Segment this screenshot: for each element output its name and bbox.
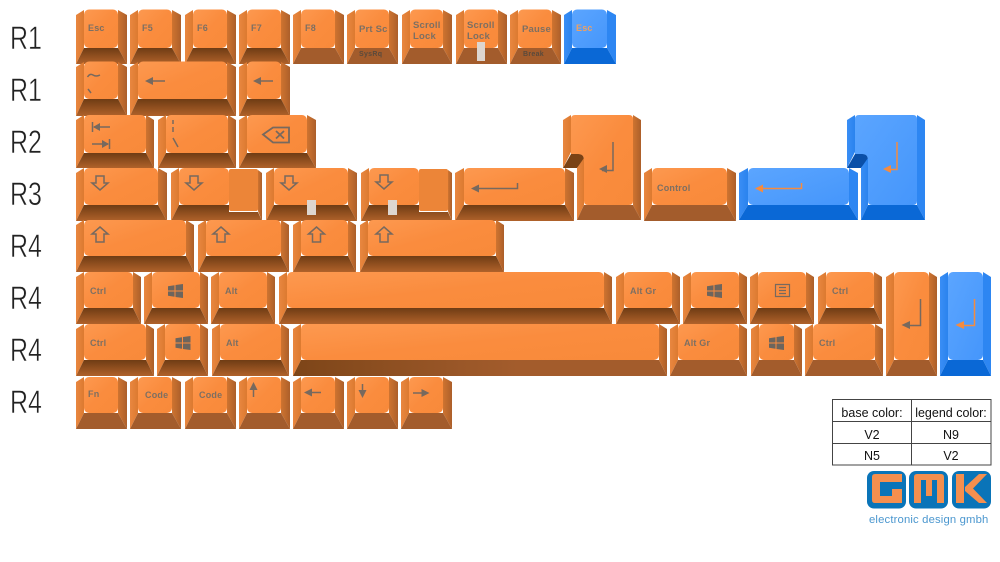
key: shift down 1	[76, 168, 167, 221]
row label: R1 second: R1	[10, 73, 42, 109]
key: Control	[644, 168, 736, 221]
color table: N9	[943, 428, 959, 442]
key: Alt Gr row seven	[670, 324, 747, 376]
key: F5: F5	[142, 23, 153, 33]
row label: R4 shift row: R4	[10, 229, 42, 265]
key: spacebar 7u	[279, 272, 612, 324]
key: F6	[185, 10, 236, 64]
key: Code: Code	[145, 390, 168, 400]
key: arrow down	[347, 377, 398, 429]
key: stepped shift with stem	[361, 168, 452, 221]
key: Alt Gr: Alt Gr	[630, 286, 656, 296]
color table: V2	[864, 428, 880, 442]
key: Code second	[185, 377, 236, 429]
key: Prt Sc: Prt Sc	[359, 24, 388, 35]
key: F7	[239, 10, 290, 64]
key: Prt Sc	[347, 10, 398, 64]
key: shift up large	[76, 220, 194, 272]
key: Scroll Lock: Scroll	[413, 20, 441, 31]
key: F5	[130, 10, 181, 64]
key: blue Esc: Esc	[576, 23, 593, 33]
key: Windows	[144, 272, 208, 324]
key: ISO enter orange	[563, 115, 641, 220]
key: stepped shift	[171, 168, 262, 221]
key: Alt	[211, 272, 275, 324]
row label: R1: R1	[10, 21, 42, 57]
key: F8	[293, 10, 344, 64]
key: Ctrl right	[818, 272, 882, 324]
key: backspace 1u	[239, 62, 290, 116]
key: Scroll Lock with stem: Scroll	[467, 20, 495, 31]
key: Windows right	[683, 272, 747, 324]
key: blue long enter	[739, 168, 858, 220]
key: F8: F8	[305, 23, 316, 33]
key: Menu	[750, 272, 814, 324]
key: Alt Gr	[616, 272, 680, 324]
key: shift up small	[293, 220, 356, 272]
tagline: electronic design gmbh	[869, 514, 988, 526]
key: Ctrl right row seven	[805, 324, 883, 376]
key: Windows right row seven	[751, 324, 802, 376]
key: blue Esc	[564, 10, 616, 64]
key: Pause	[510, 10, 561, 64]
key: Tab	[76, 115, 154, 168]
row label: R2: R2	[10, 125, 42, 161]
row label: R4 control row: R4	[10, 281, 42, 317]
key: F6: F6	[197, 23, 208, 33]
key: Windows row seven	[157, 324, 208, 376]
key: Esc: Esc	[88, 23, 105, 33]
key: Ctrl: Ctrl	[90, 286, 106, 296]
key: Alt Gr row seven: Alt Gr	[684, 338, 710, 348]
color table: base color:	[841, 406, 903, 420]
key: arrow left	[293, 377, 344, 429]
key: Alt row seven: Alt	[226, 338, 239, 348]
key: Ctrl row seven	[76, 324, 154, 376]
key: Pause: Pause	[522, 24, 551, 35]
key: backslash	[158, 115, 236, 168]
key: long enter	[455, 168, 574, 221]
GMK logo	[867, 471, 991, 508]
key: tilde	[76, 62, 127, 116]
key: arrow right	[401, 377, 452, 429]
key: Ctrl right row seven: Ctrl	[819, 338, 835, 348]
key: shift up medium	[198, 220, 289, 272]
key: tall enter orange	[886, 272, 937, 376]
key: tall enter blue	[940, 272, 991, 376]
key: Control: Control	[657, 183, 690, 193]
key: Scroll Lock	[402, 10, 452, 64]
key: Esc	[76, 10, 127, 64]
key: backspace symbol	[239, 115, 316, 168]
color table: V2	[943, 449, 959, 463]
key: Fn: Fn	[88, 389, 99, 399]
key: Ctrl right: Ctrl	[832, 286, 848, 296]
row label: R4 function row: R4	[10, 385, 42, 421]
key: F7: F7	[251, 23, 262, 33]
row label: R4 control row two: R4	[10, 333, 42, 369]
key: Scroll Lock with stem	[456, 10, 507, 64]
key: Alt: Alt	[225, 286, 238, 296]
key: Alt row seven	[212, 324, 289, 376]
color table	[832, 400, 991, 465]
key: Code	[130, 377, 181, 429]
key: Scroll Lock with stem: Lock	[467, 31, 490, 42]
color table: N5	[864, 449, 880, 463]
key: Ctrl	[76, 272, 141, 324]
key: Ctrl row seven: Ctrl	[90, 338, 106, 348]
key: blue ISO enter	[847, 115, 925, 220]
key: Scroll Lock: Lock	[413, 31, 436, 42]
key: spacebar wide	[293, 324, 667, 376]
key: backspace 2u	[130, 62, 236, 116]
key: arrow up	[239, 377, 290, 429]
key: shift up wide	[360, 220, 504, 272]
key: Prt Sc: SysRq	[359, 51, 382, 58]
key: Pause: Break	[523, 51, 544, 58]
key: Fn	[76, 377, 127, 429]
key: Code second: Code	[199, 390, 222, 400]
key: shift with stem	[266, 168, 357, 221]
row label: R3: R3	[10, 177, 42, 213]
color table: legend color:	[915, 406, 987, 420]
